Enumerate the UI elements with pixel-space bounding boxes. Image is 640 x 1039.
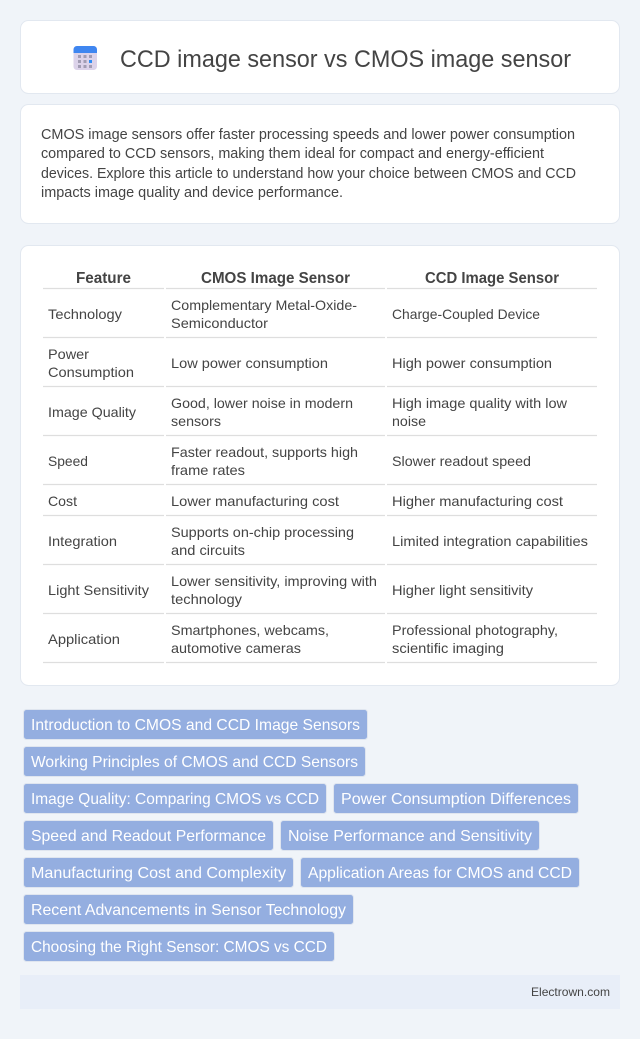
footer: Electrown.com — [531, 985, 610, 999]
table header row: CMOS Image Sensor — [201, 270, 350, 287]
tag: working principles — [24, 746, 366, 776]
title: CCD image sensor vs CMOS image sensor — [120, 46, 571, 73]
row: image quality: sensors — [171, 413, 221, 429]
row: image quality — [48, 395, 568, 429]
row: application — [48, 622, 558, 656]
text block: intro paragraph: devices. Explore this article to understand how your choice between CMOS and CCD — [41, 166, 576, 182]
row: application: automotive cameras — [171, 640, 301, 656]
tag: image quality: Image Quality: Comparing CMOS vs CCD — [31, 791, 319, 808]
row: image quality: Good, lower noise in modern — [171, 395, 353, 411]
row: cost: Cost — [48, 493, 77, 509]
tag: recent advancements — [24, 894, 354, 924]
panel: introduction — [20, 104, 620, 224]
row: integration: Integration — [48, 533, 117, 549]
row: speed: Slower readout speed — [392, 453, 531, 469]
row: speed: Faster readout, supports high — [171, 444, 358, 460]
tag: introduction: Introduction to CMOS and CCD Image Sensors — [31, 717, 360, 734]
row: technology: Complementary Metal-Oxide- — [171, 297, 357, 313]
tag: choosing the right sensor: Choosing the Right Sensor: CMOS vs CCD — [31, 939, 327, 956]
panel: header — [20, 20, 620, 94]
table header row — [76, 270, 559, 287]
tag: working principles: Working Principles of CMOS and CCD Sensors — [31, 754, 358, 771]
row: application: scientific imaging — [392, 640, 504, 656]
row: light sensitivity: Lower sensitivity, improving with — [171, 573, 377, 589]
tag: speed and readout: Speed and Readout Performance — [31, 828, 266, 845]
row: power consumption: Low power consumption — [171, 355, 328, 371]
tag: noise performance — [280, 820, 540, 850]
tag: image quality — [24, 784, 326, 814]
row: cost — [48, 493, 563, 509]
row: speed — [48, 444, 531, 478]
tag: power consumption: Power Consumption Differences — [341, 791, 571, 808]
text block: intro paragraph: impacts image quality and device performance. — [41, 185, 343, 201]
table header row: CCD Image Sensor — [425, 270, 559, 287]
panel: comparison table — [20, 246, 620, 686]
text block: intro paragraph — [41, 127, 576, 201]
row: integration — [48, 524, 588, 558]
tag: manufacturing cost: Manufacturing Cost and Complexity — [31, 865, 286, 882]
table header row: Feature — [76, 270, 131, 287]
row: integration: Supports on-chip processing — [171, 524, 354, 540]
icon: sensor grid — [74, 46, 97, 70]
tag: application areas: Application Areas for CMOS and CCD — [308, 865, 572, 882]
panel: topic tags — [24, 710, 580, 962]
row: power consumption: Consumption — [48, 364, 134, 380]
row: integration: and circuits — [171, 542, 245, 558]
row: power consumption: High power consumption — [392, 355, 552, 371]
row: cost: Lower manufacturing cost — [171, 493, 339, 509]
row: light sensitivity: Higher light sensitivity — [392, 582, 533, 598]
row: integration: Limited integration capabilities — [392, 533, 588, 549]
row: technology: Semiconductor — [171, 315, 268, 331]
row: speed: Speed — [48, 453, 88, 469]
footer — [20, 975, 620, 1009]
row: speed: frame rates — [171, 462, 245, 478]
row: power consumption: Power — [48, 346, 89, 362]
tag: recent advancements: Recent Advancements in Sensor Technology — [31, 902, 346, 919]
tag: introduction — [24, 710, 368, 740]
row: technology: Technology — [48, 306, 122, 322]
text block: intro paragraph: CMOS image sensors offer faster processing speeds and lower power consumption — [41, 127, 575, 143]
row: power consumption — [48, 346, 552, 380]
tag: speed and readout — [24, 820, 274, 850]
row: application: Application — [48, 631, 120, 647]
row: light sensitivity: Light Sensitivity — [48, 582, 149, 598]
row: light sensitivity: technology — [171, 591, 242, 607]
text block: intro paragraph: compared to CCD sensors, making them ideal for compact and energy-efficient — [41, 146, 544, 162]
row: cost: Higher manufacturing cost — [392, 493, 563, 509]
row: application: Smartphones, webcams, — [171, 622, 329, 638]
tag: power consumption — [334, 784, 578, 814]
tag: application areas — [300, 858, 580, 888]
row: technology: Charge-Coupled Device — [392, 306, 540, 322]
row: image quality: noise — [392, 413, 426, 429]
row: light sensitivity — [48, 573, 533, 607]
tag: manufacturing cost — [24, 858, 294, 888]
tag: choosing the right sensor — [24, 932, 334, 962]
row: application: Professional photography, — [392, 622, 558, 638]
tag: noise performance: Noise Performance and Sensitivity — [288, 828, 532, 845]
row: technology — [48, 297, 540, 331]
row: image quality: Image Quality — [48, 404, 136, 420]
row: image quality: High image quality with low — [392, 395, 568, 411]
